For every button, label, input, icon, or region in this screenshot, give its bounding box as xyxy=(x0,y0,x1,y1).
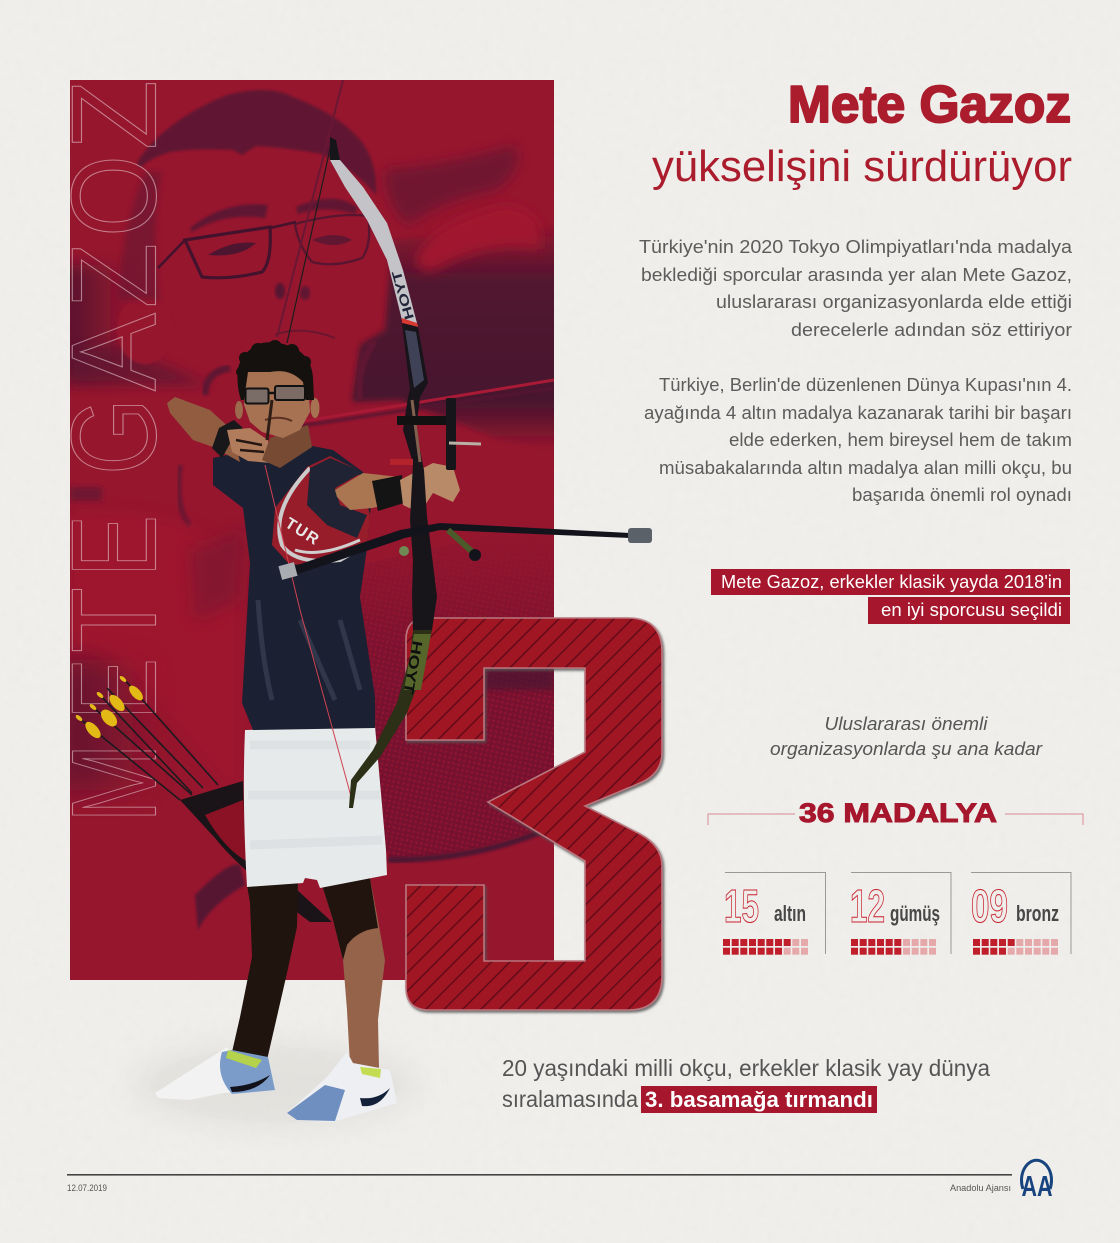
ranking statement: 20 yaşındaki milli okçu, erkekler klasik yay dünya xyxy=(502,1055,990,1081)
title: Mete Gazoz xyxy=(788,76,1071,134)
italic intro to medal count: Uluslararası önemli xyxy=(824,714,989,734)
footer rule xyxy=(67,1174,1012,1176)
lower limb xyxy=(349,630,432,808)
text block: second paragraph xyxy=(644,374,1072,505)
stabilizer xyxy=(278,523,652,580)
vertical outlined name: Z xyxy=(46,80,182,150)
shirt xyxy=(213,445,375,730)
vertical outlined name: E xyxy=(46,658,182,720)
vertical outlined name: O xyxy=(46,155,182,237)
text block: intro paragraph: uluslararası organizasyonlarda elde ettiği xyxy=(716,291,1072,312)
lower limb: HOYT xyxy=(401,639,426,696)
text block: second paragraph: ayağında 4 altın madalya kazanarak tarihi bir başarı xyxy=(644,402,1072,423)
big number 3 xyxy=(406,618,662,1010)
right dark backdrop xyxy=(352,145,560,450)
text block: intro paragraph xyxy=(639,236,1073,340)
text block: second paragraph: başarıda önemli rol oynadı xyxy=(852,484,1072,505)
vertical outlined name: G xyxy=(46,398,182,475)
background hands and shirt xyxy=(70,368,245,930)
archer figure xyxy=(75,340,460,1122)
text block: second paragraph: müsabakalarında altın madalya alan milli okçu, bu xyxy=(659,457,1072,478)
icon: Anadolu Ajansı logo xyxy=(1021,1160,1053,1203)
stat: silver medals: gümüş xyxy=(890,901,940,926)
upper limb: HOYT xyxy=(389,269,417,321)
front arm xyxy=(335,463,460,513)
icon: Anadolu Ajansı logo: AA xyxy=(1022,1171,1053,1203)
italic intro to medal count: organizasyonlarda şu ana kadar xyxy=(770,739,1043,759)
callout: best athlete: Mete Gazoz, erkekler klasik yayda 2018'in xyxy=(721,571,1062,592)
rear arm xyxy=(167,397,270,463)
text block: intro paragraph: Türkiye'nin 2020 Tokyo Olimpiyatları'nda madalya xyxy=(639,236,1073,257)
pictogram: 15 gold xyxy=(723,939,808,955)
pictogram: 12 silver xyxy=(851,939,936,955)
medal total heading xyxy=(708,798,1083,828)
text block: intro paragraph: beklediği sporcular arasında yer alan Mete Gazoz, xyxy=(641,264,1072,285)
ranking statement xyxy=(502,1055,990,1113)
ranking statement: sıralamasında xyxy=(502,1086,638,1112)
callout: best athlete xyxy=(711,569,1070,624)
title: yükselişini sürdürüyor xyxy=(652,142,1072,191)
stat: silver medals: 12 xyxy=(850,880,885,932)
stat: gold medals: 15 xyxy=(724,880,759,932)
callout: best athlete: en iyi sporcusu seçildi xyxy=(881,599,1062,620)
shorts xyxy=(244,726,387,888)
medal total heading: 36 MADALYA xyxy=(799,798,997,828)
bow xyxy=(265,137,652,808)
chest guard: TUR xyxy=(282,515,322,549)
bow string xyxy=(265,140,352,800)
vertical outlined name xyxy=(46,80,182,823)
quiver and arrows xyxy=(75,675,332,922)
background target texture xyxy=(356,520,554,860)
pictogram: 9 bronze xyxy=(973,939,1058,955)
legs xyxy=(232,878,385,1068)
vertical outlined name: A xyxy=(46,313,182,391)
vertical outlined name: Z xyxy=(46,243,182,308)
panel: red portrait background xyxy=(60,80,560,980)
background arrow line xyxy=(300,380,554,426)
text block: second paragraph: elde ederken, hem bireysel hem de takım xyxy=(729,429,1072,450)
stat: bronze medals: bronz xyxy=(1016,901,1059,926)
text block: second paragraph: Türkiye, Berlin'de düzenlenen Dünya Kupası'nın 4. xyxy=(659,374,1072,395)
text block: intro paragraph: derecelerle adından söz ettiriyor xyxy=(791,319,1072,340)
source credit: Anadolu Ajansı xyxy=(950,1183,1011,1193)
riser and sight xyxy=(390,323,481,630)
stat: gold medals xyxy=(723,872,826,955)
ground gravel shadow xyxy=(130,1040,420,1130)
italic intro to medal count xyxy=(770,714,1043,759)
stat: bronze medals: 09 xyxy=(971,880,1008,932)
left dark backdrop xyxy=(60,265,210,790)
stat: silver medals xyxy=(850,872,951,955)
vertical outlined name: T xyxy=(46,587,182,653)
stat: gold medals: altın xyxy=(774,901,806,926)
head xyxy=(235,340,320,468)
stat: bronze medals xyxy=(971,872,1071,955)
vertical outlined name: E xyxy=(46,515,182,577)
date: 12.07.2019 xyxy=(67,1183,107,1193)
title xyxy=(652,76,1072,191)
chest guard xyxy=(272,456,370,565)
upper limb xyxy=(330,137,418,327)
vertical outlined name: M xyxy=(46,743,182,823)
ranking statement: 3. basamağa tırmandı xyxy=(645,1087,873,1112)
background face xyxy=(117,80,376,400)
shoes xyxy=(155,1047,397,1122)
